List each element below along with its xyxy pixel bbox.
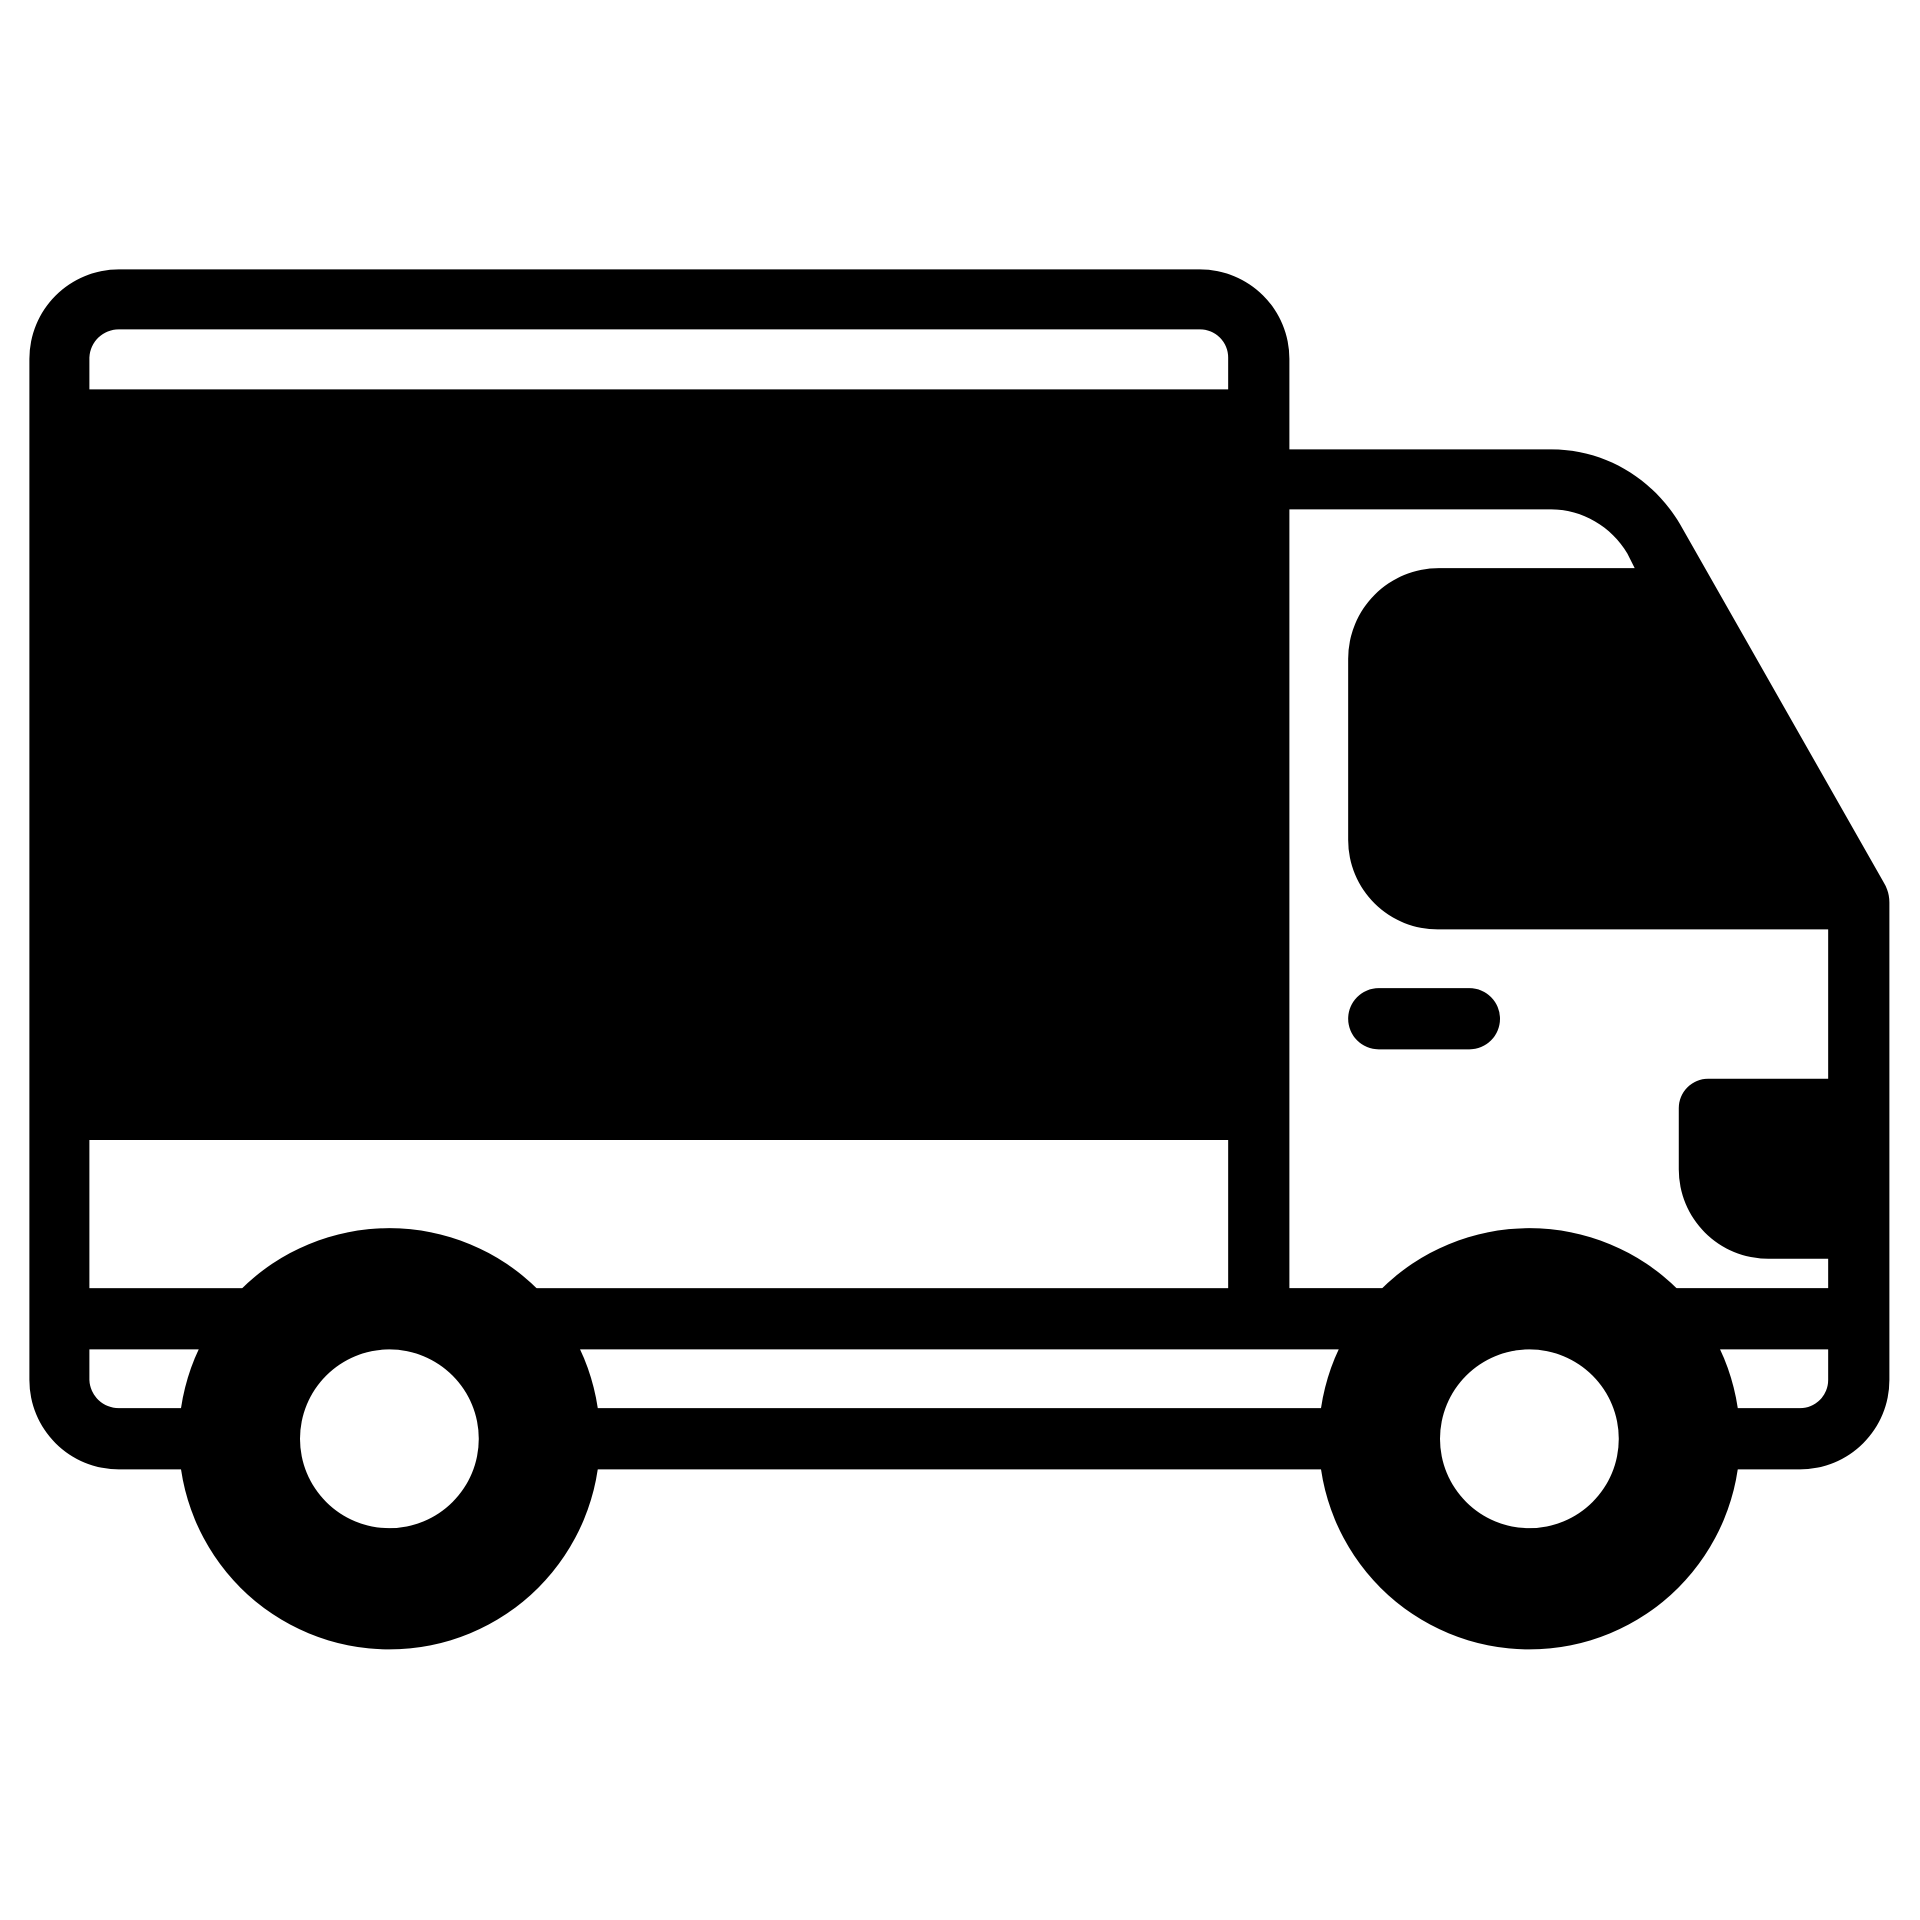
cab body panel [1289,509,1828,1288]
front wheel [1319,1228,1740,1649]
cargo box lower panel [89,1140,1228,1288]
chassis strip [89,1349,1828,1408]
door handle [1348,988,1500,1049]
rear wheel [179,1228,600,1649]
truck silhouette [29,269,1889,1469]
cargo box top window [89,329,1228,389]
